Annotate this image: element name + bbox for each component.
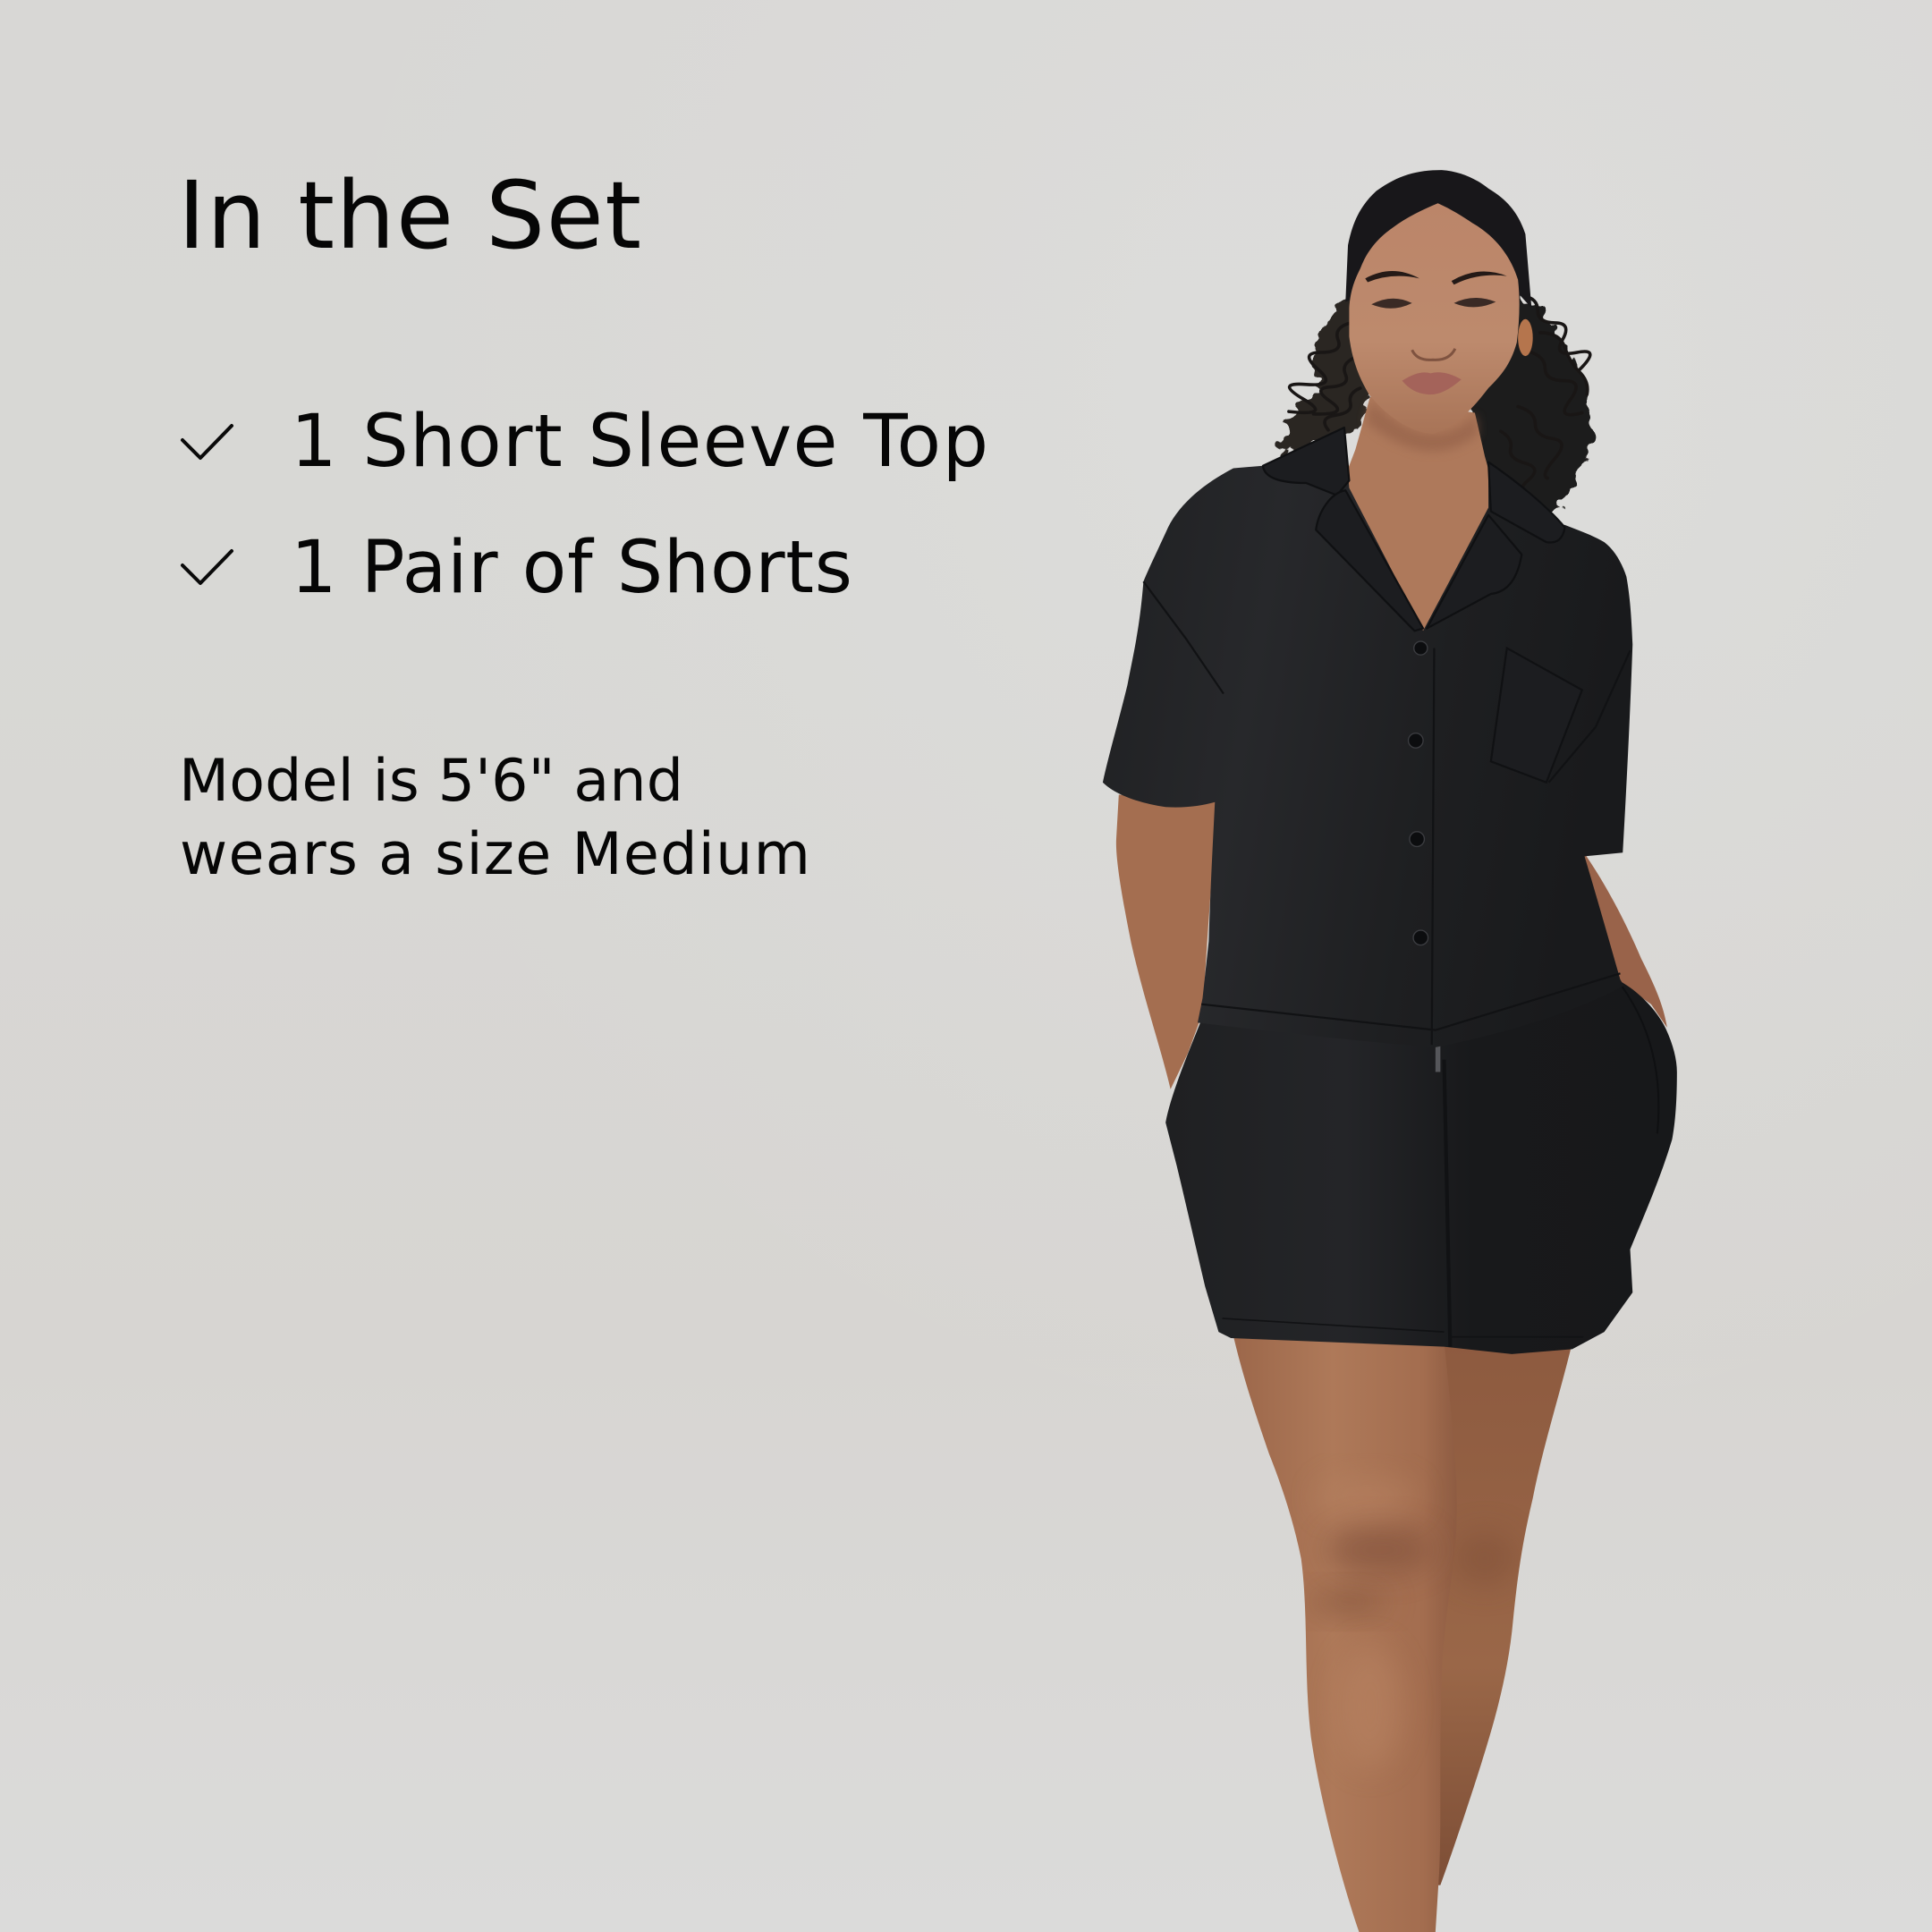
model size note: wears a size Medium bbox=[180, 821, 810, 888]
placket and seams bbox=[1143, 581, 1630, 1045]
lips bbox=[1402, 372, 1462, 394]
curls bbox=[1289, 296, 1590, 500]
pocket edge bbox=[1622, 986, 1658, 1133]
back leg bbox=[1438, 1347, 1571, 1885]
front leg bbox=[1233, 1331, 1457, 1932]
checklist bbox=[182, 400, 988, 610]
model figure bbox=[1103, 170, 1677, 1932]
shirt bbox=[1103, 428, 1632, 1047]
head bbox=[1345, 170, 1533, 434]
item: short sleeve top: 1 Short Sleeve Top bbox=[291, 400, 988, 484]
brows bbox=[1365, 271, 1507, 284]
shorts bbox=[1165, 979, 1677, 1354]
nose bbox=[1412, 349, 1455, 360]
neck and chest bbox=[1341, 397, 1494, 636]
item: shorts: 1 Pair of Shorts bbox=[291, 526, 852, 610]
eyes bbox=[1371, 298, 1496, 309]
right arm bbox=[1582, 851, 1667, 1028]
left arm bbox=[1116, 795, 1220, 1089]
neck shadow bbox=[1365, 401, 1479, 452]
title: In the Set bbox=[178, 161, 641, 270]
model size note bbox=[179, 748, 810, 888]
drawstring bbox=[1436, 1045, 1440, 1072]
ear bbox=[1518, 319, 1533, 356]
model size note: Model is 5'6" and bbox=[179, 748, 683, 815]
face bbox=[1349, 203, 1520, 434]
pocket bbox=[1491, 648, 1582, 783]
buttons bbox=[1409, 641, 1428, 945]
icon: check mark 1 bbox=[182, 426, 232, 458]
hair cap bbox=[1345, 170, 1531, 308]
icon: check mark 2 bbox=[182, 551, 232, 583]
collar and lapels bbox=[1263, 428, 1564, 631]
hair behind head bbox=[1284, 286, 1592, 513]
